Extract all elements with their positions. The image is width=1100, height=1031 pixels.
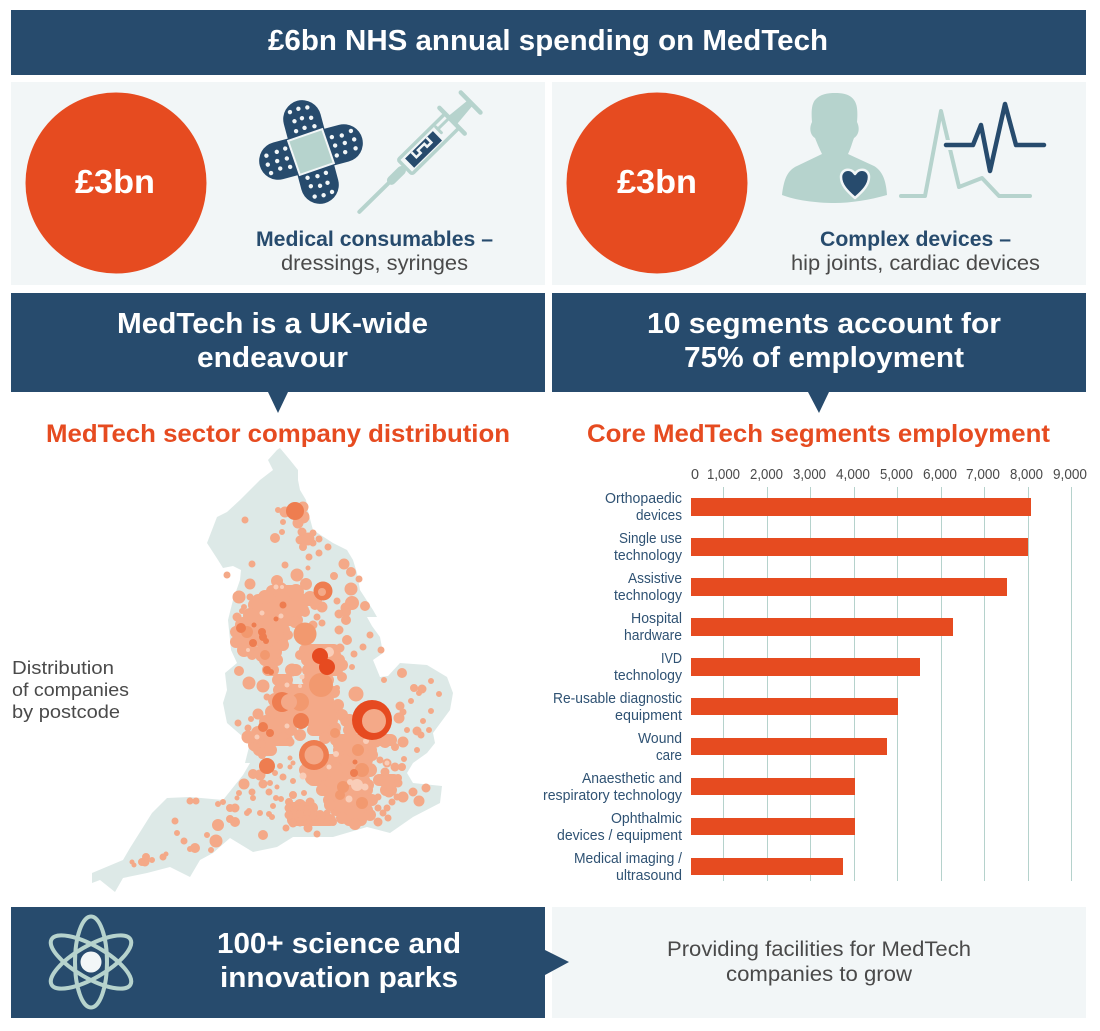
segment labels: respiratory technology	[543, 788, 683, 804]
axis labels: 1,000	[707, 467, 740, 483]
light company clusters	[239, 591, 394, 820]
pale company dots	[246, 584, 390, 802]
axis labels: 7,000	[966, 467, 1000, 483]
panel: medical consumables	[11, 82, 545, 285]
segment labels: Medical imaging /	[574, 851, 683, 867]
axis gridlines	[724, 487, 1072, 881]
banner: UK-wide endeavour: MedTech is a UK-wide	[117, 308, 428, 340]
caption: complex devices	[791, 228, 1040, 275]
segment labels: devices	[636, 508, 682, 524]
map annotation: Distribution	[12, 658, 114, 678]
largest ring centre	[362, 709, 386, 733]
caption: medical consumables: dressings, syringes	[281, 252, 468, 275]
axis labels: 6,000	[923, 467, 957, 483]
segment labels: technology	[614, 588, 683, 604]
segment labels: care	[656, 748, 682, 764]
banner: 10 segments	[552, 293, 1086, 413]
bar chart: core MedTech segments employment	[543, 467, 1087, 884]
segment labels: Wound	[638, 731, 682, 747]
segment labels: technology	[614, 548, 683, 564]
segment labels: ultrasound	[616, 868, 682, 884]
rounded cluster lobes	[230, 582, 402, 830]
red company dots	[312, 648, 392, 740]
axis labels: 9,000	[1053, 467, 1087, 483]
banner: UK-wide endeavour: endeavour	[197, 342, 348, 374]
icon: person with heart	[782, 93, 887, 203]
banner: science and innovation parks: 100+ science and	[217, 928, 461, 960]
segment labels	[543, 491, 683, 884]
icon: bandage	[246, 87, 376, 217]
panel: providing facilities	[552, 907, 1086, 1018]
banner: 10 segments: 10 segments account for	[647, 308, 1001, 340]
segment labels: Assistive	[628, 571, 682, 587]
axis labels: 4,000	[836, 467, 870, 483]
title banner	[11, 10, 1086, 75]
segment labels: Re-usable diagnostic	[553, 691, 682, 707]
light company dots	[130, 502, 442, 867]
axis labels: 8,000	[1010, 467, 1043, 483]
banner: 10 segments: 75% of employment	[684, 342, 964, 374]
icon: atom	[44, 916, 138, 1008]
panel: providing facilities: companies to grow	[726, 963, 913, 986]
dark company dots	[236, 502, 358, 777]
segment labels: technology	[614, 668, 683, 684]
caption: medical consumables	[256, 228, 493, 275]
mid-tone company dots	[241, 622, 369, 809]
light ring centres	[281, 588, 326, 764]
map annotation: by postcode	[12, 702, 120, 722]
map annotation	[12, 658, 129, 722]
value circle: £3bn devices: £3bn	[617, 163, 697, 200]
axis labels: 2,000	[750, 467, 783, 483]
axis labels: 5,000	[880, 467, 913, 483]
banner: UK-wide endeavour	[11, 293, 545, 413]
value circle: £3bn consumables	[26, 92, 206, 274]
title banner: £6bn NHS annual spending on MedTech	[268, 25, 828, 57]
map annotation: of companies	[12, 680, 129, 700]
heading: company distribution: MedTech sector company distribution	[46, 420, 510, 448]
axis labels: 0	[691, 467, 699, 483]
segment labels: Anaesthetic and	[582, 771, 682, 787]
caption: complex devices: hip joints, cardiac devices	[791, 252, 1040, 275]
value circle: £3bn devices	[566, 92, 748, 274]
segment labels: hardware	[624, 628, 682, 644]
segment labels: Ophthalmic	[611, 811, 682, 827]
panel: complex devices	[552, 82, 1086, 285]
map outline	[92, 448, 453, 892]
bars	[691, 498, 1031, 875]
axis labels	[691, 467, 1087, 483]
icon: heart trace chart	[901, 104, 1044, 196]
panel: providing facilities: Providing facilities for MedTech	[667, 938, 971, 961]
banner: science and innovation parks: innovation parks	[220, 962, 458, 994]
caption: complex devices: Complex devices –	[820, 228, 1011, 251]
segment labels: devices / equipment	[557, 828, 682, 844]
value circle: £3bn consumables: £3bn	[75, 163, 155, 200]
segment labels: IVD	[661, 651, 682, 667]
segment labels: Single use	[619, 531, 682, 547]
axis labels: 3,000	[793, 467, 826, 483]
map: England company distribution	[92, 448, 453, 892]
caption: medical consumables: Medical consumables –	[256, 228, 493, 251]
heading: segments employment: Core MedTech segments employment	[587, 420, 1051, 448]
banner: science and innovation parks	[11, 907, 569, 1018]
segment labels: Orthopaedic	[605, 491, 682, 507]
segment labels: Hospital	[631, 611, 682, 627]
icon: syringe	[347, 90, 483, 225]
segment labels: equipment	[615, 708, 682, 724]
